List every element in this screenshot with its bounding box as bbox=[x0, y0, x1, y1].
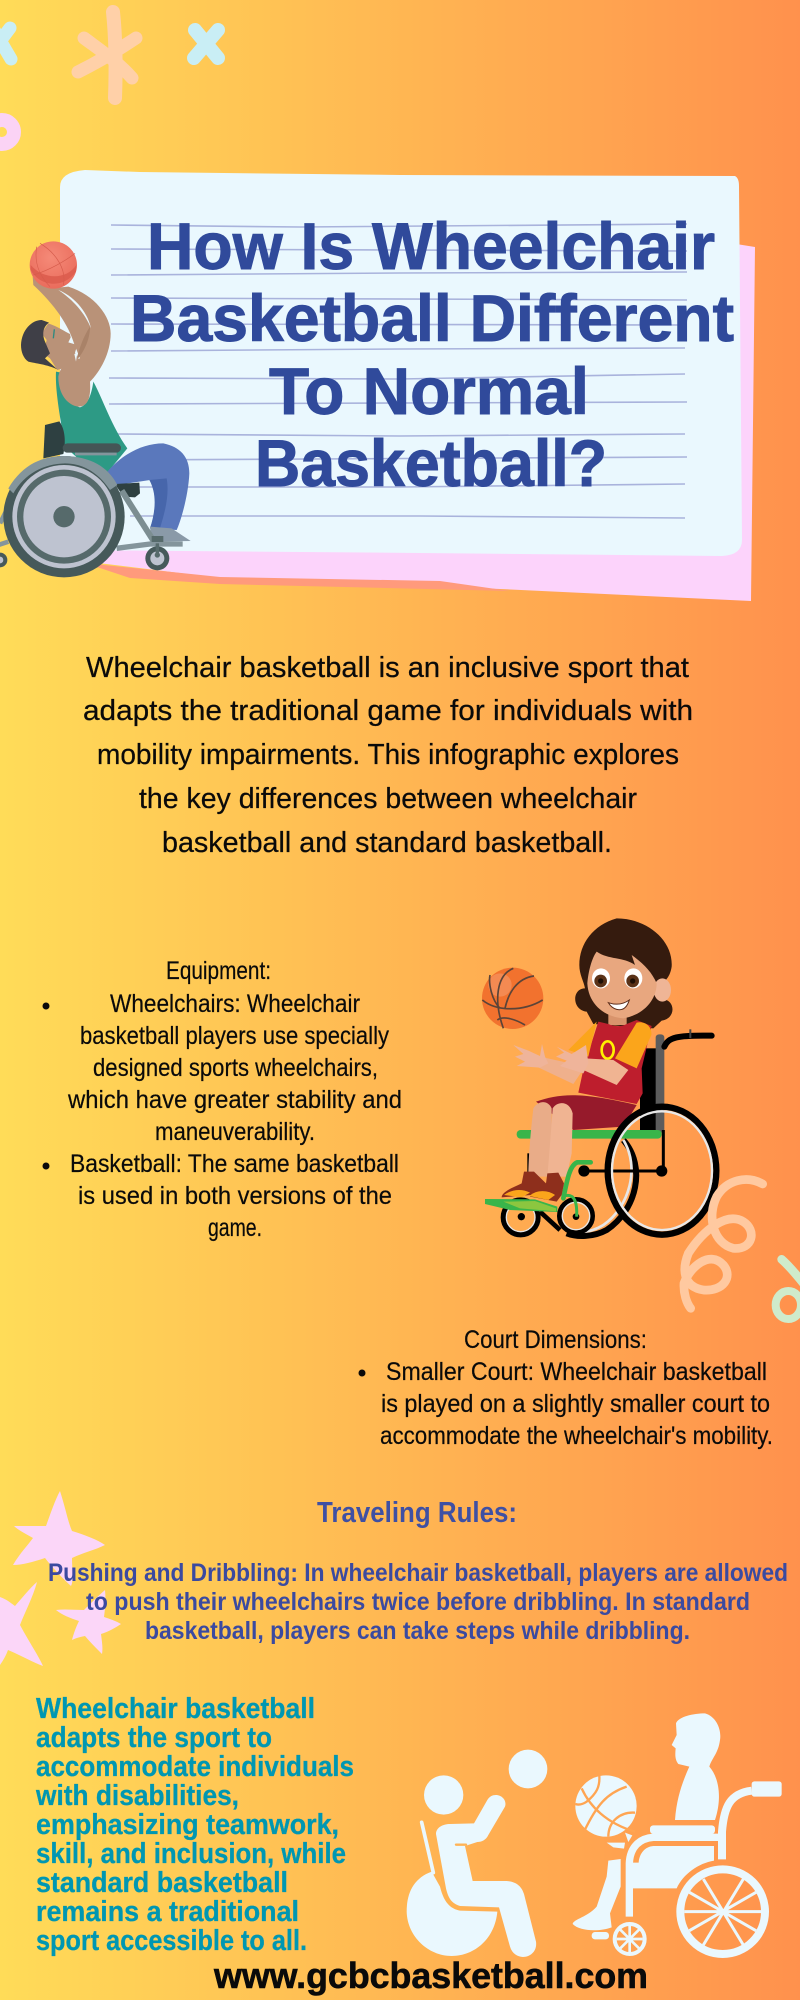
big wheel bbox=[608, 1107, 716, 1235]
equipment text bbox=[42, 957, 402, 1242]
frame bars bbox=[584, 1130, 663, 1171]
caster bbox=[615, 1924, 645, 1954]
face bbox=[587, 952, 657, 1018]
chair frame bbox=[629, 1837, 718, 1917]
wheel bbox=[407, 1872, 497, 1956]
traveling rules text: basketball, players can take steps while dribbling. bbox=[145, 1617, 690, 1645]
intro text: adapts the traditional game for individuals with bbox=[83, 695, 693, 727]
face bbox=[42, 323, 80, 370]
seat bbox=[517, 1130, 662, 1139]
backrest and armrest bbox=[43, 421, 65, 458]
title: Basketball? bbox=[255, 426, 607, 500]
intro text: Wheelchair basketball is an inclusive sport that bbox=[86, 652, 689, 684]
push handle bbox=[664, 1036, 712, 1047]
traveling rules text bbox=[48, 1559, 788, 1645]
ruled lines bbox=[109, 224, 687, 518]
shoes bbox=[502, 1172, 546, 1197]
intro text: mobility impairments. This infographic explores bbox=[97, 739, 679, 771]
seat body bbox=[633, 1846, 714, 1888]
seat cushion bbox=[650, 1825, 715, 1834]
decorative squiggle bbox=[684, 1180, 800, 1319]
website url: www.gcbcbasketball.com bbox=[213, 1955, 648, 1996]
head bbox=[424, 1775, 463, 1815]
ball bbox=[509, 1750, 547, 1788]
armpit notch bbox=[74, 353, 77, 362]
big wheel bbox=[680, 1869, 765, 1954]
frame bbox=[122, 491, 154, 542]
arms bbox=[537, 1057, 585, 1084]
pants bbox=[107, 443, 189, 530]
icon: seated player with ball in wheelchair bbox=[573, 1713, 782, 1954]
conclusion text: sport accessible to all. bbox=[36, 1925, 307, 1957]
conclusion text: emphasizing teamwork, bbox=[36, 1809, 339, 1841]
court dimensions text: Court Dimensions: bbox=[464, 1326, 647, 1354]
neck bbox=[608, 1013, 627, 1025]
backrest bbox=[640, 1048, 657, 1132]
equipment text: Equipment: bbox=[166, 957, 271, 985]
decorative stars bbox=[0, 1491, 121, 1666]
illustration: girl in wheelchair with basketball bbox=[482, 918, 716, 1236]
torso and head bbox=[672, 1713, 720, 1820]
court dimensions text: Smaller Court: Wheelchair basketball bbox=[386, 1358, 767, 1386]
jersey bbox=[56, 372, 127, 473]
hands bbox=[513, 1044, 548, 1068]
equipment text: Basketball: The same basketball bbox=[70, 1150, 399, 1178]
sleeves bbox=[568, 1022, 597, 1057]
intro text: the key differences between wheelchair bbox=[139, 783, 637, 815]
arms bbox=[33, 277, 111, 407]
traveling rules text: to push their wheelchairs twice before dribbling. In standard bbox=[86, 1588, 750, 1616]
equipment text: basketball players use specially bbox=[80, 1022, 389, 1050]
shirt bbox=[578, 1020, 652, 1104]
eyebrow bbox=[51, 329, 56, 338]
court dimensions text: is played on a slightly smaller court to bbox=[381, 1390, 770, 1418]
back wheel bbox=[567, 1140, 636, 1236]
backrest rail bbox=[422, 1822, 433, 1873]
hair bbox=[21, 320, 57, 369]
intro text: basketball and standard basketball. bbox=[162, 827, 612, 859]
basketball bbox=[575, 1775, 637, 1837]
green tube bbox=[563, 1162, 591, 1198]
conclusion text: accommodate individuals bbox=[36, 1751, 354, 1783]
icon: player throwing ball in wheelchair bbox=[407, 1750, 547, 1957]
conclusion text: with disabilities, bbox=[35, 1780, 239, 1812]
rear frame bits bbox=[0, 510, 8, 545]
equipment text: maneuverability. bbox=[155, 1118, 315, 1146]
arm shading bbox=[76, 327, 90, 361]
basketball bbox=[30, 241, 77, 289]
seat bbox=[115, 483, 140, 497]
footrest bbox=[485, 1199, 557, 1212]
caster bbox=[145, 546, 169, 570]
salmon sliver under sheet bbox=[85, 563, 510, 591]
equipment text: is used in both versions of the bbox=[78, 1182, 392, 1210]
shoe bbox=[150, 527, 191, 542]
body bbox=[436, 1795, 536, 1957]
shorts bbox=[536, 1095, 637, 1130]
equipment text: designed sports wheelchairs, bbox=[93, 1054, 378, 1082]
conclusion text: Wheelchair basketball bbox=[36, 1693, 315, 1725]
hair bbox=[575, 918, 672, 1028]
gap between arms bbox=[58, 290, 91, 328]
conclusion text: skill, and inclusion, while bbox=[36, 1838, 346, 1870]
conclusion text bbox=[35, 1693, 354, 1957]
legs bbox=[528, 1102, 552, 1177]
eyes bbox=[592, 968, 610, 988]
leg and foot bbox=[573, 1859, 621, 1930]
back pink sheet bbox=[90, 243, 755, 601]
conclusion text: adapts the sport to bbox=[36, 1722, 272, 1754]
push handle bbox=[722, 1791, 752, 1859]
ear bbox=[654, 978, 671, 1002]
illustration: man shooting a basketball in wheelchair bbox=[0, 241, 191, 577]
title: To Normal bbox=[269, 354, 589, 428]
note card bbox=[60, 170, 742, 556]
hand bbox=[607, 1843, 625, 1849]
conclusion text: standard basketball bbox=[36, 1867, 288, 1899]
court dimensions text bbox=[358, 1326, 773, 1450]
equipment text: which have greater stability and bbox=[67, 1086, 402, 1114]
title: How Is Wheelchair bbox=[147, 209, 715, 283]
title: Basketball Different bbox=[130, 281, 734, 355]
equipment text: game. bbox=[208, 1214, 262, 1242]
wheel bbox=[3, 456, 125, 577]
conclusion text: remains a traditional bbox=[36, 1896, 299, 1928]
mouth bbox=[608, 1000, 629, 1010]
equipment text: Wheelchairs: Wheelchair bbox=[110, 990, 360, 1018]
intro text bbox=[83, 652, 693, 859]
heading: traveling rules: Traveling Rules: bbox=[317, 1497, 517, 1529]
shirt number bbox=[602, 1041, 614, 1059]
title bbox=[130, 209, 734, 500]
decorative doodles top bbox=[0, 12, 218, 144]
casters bbox=[503, 1200, 538, 1235]
cut in armpit bbox=[456, 1841, 466, 1848]
basketball bbox=[482, 968, 543, 1029]
